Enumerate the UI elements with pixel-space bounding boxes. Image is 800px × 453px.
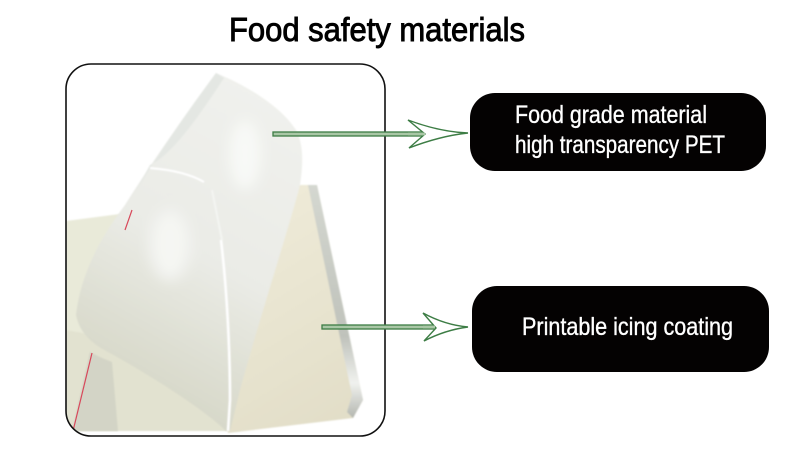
label: food grade material: Food grade material	[515, 101, 707, 129]
label: printable icing coating	[472, 286, 769, 372]
arrow: to icing coating label	[322, 313, 468, 341]
label: printable icing coating: Printable icing coating	[522, 313, 733, 341]
photo: red tear lines	[73, 210, 132, 431]
photo frame border	[66, 64, 385, 436]
product photo panel	[66, 64, 385, 436]
photo: right cream sheet with silver edge	[227, 184, 364, 434]
photo: lower-left film fold	[72, 352, 118, 431]
photo: left cream sheet	[66, 212, 240, 431]
title: Food safety materials	[229, 11, 525, 48]
label: food grade material	[470, 93, 766, 171]
arrow: to PET label	[273, 120, 468, 148]
photo: transparent PET film	[76, 73, 302, 431]
label: food grade material: high transparency PET	[515, 131, 725, 159]
film highlight	[148, 74, 223, 170]
